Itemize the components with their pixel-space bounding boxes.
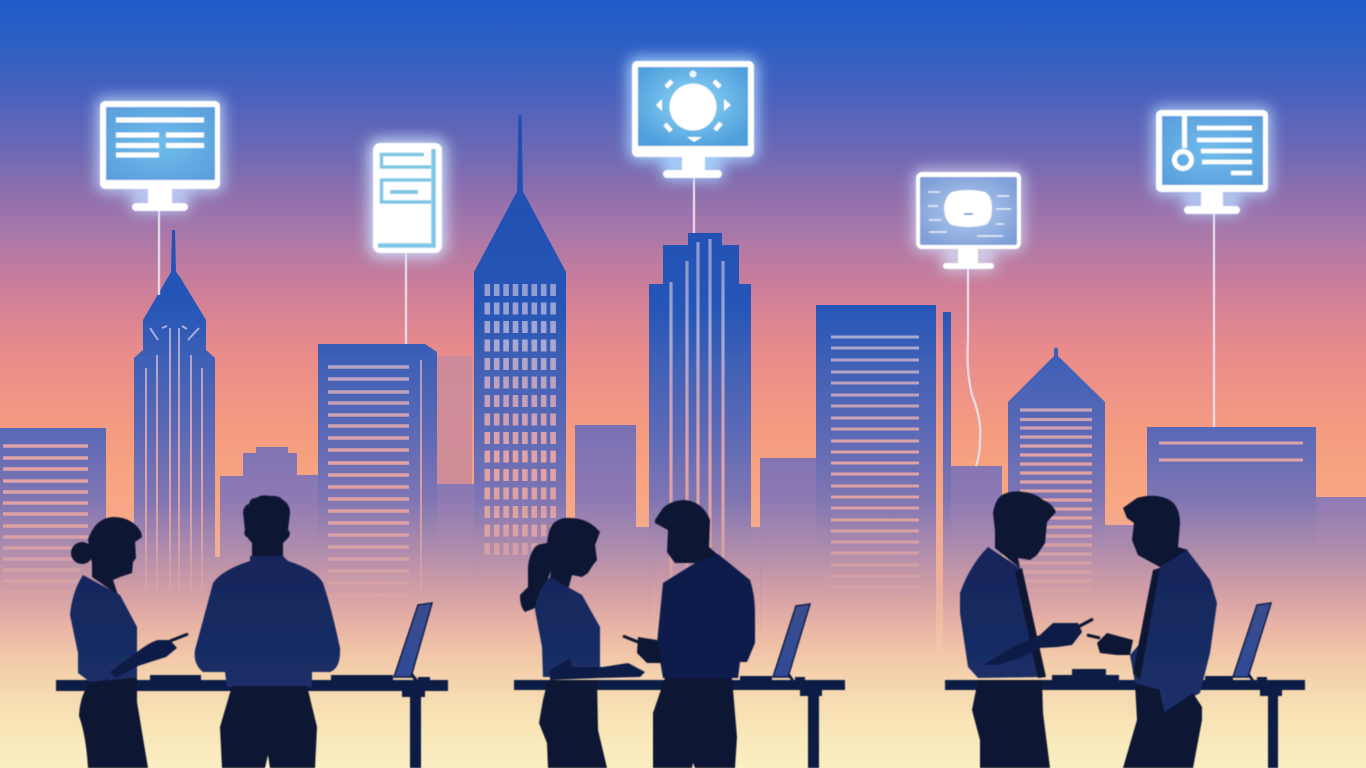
team one at left desk <box>56 495 448 768</box>
man on right with tie <box>1087 496 1217 768</box>
device: tablet document panel <box>368 138 447 258</box>
laptop two <box>773 604 810 677</box>
team three at right desk <box>945 491 1305 768</box>
back skyline layer <box>106 356 1366 672</box>
building: far left slatted block <box>0 428 106 672</box>
building: peaked roof tower <box>1008 348 1105 672</box>
connector lines from screens to the city <box>159 178 1214 466</box>
man seen from behind <box>195 495 340 768</box>
monitor: text panel <box>96 97 224 212</box>
monitor: hub diagram panel <box>913 169 1024 271</box>
woman with bun <box>70 517 188 768</box>
building: wide slatted tower <box>816 305 951 672</box>
desk three <box>945 669 1305 768</box>
team two at centre desk <box>514 500 845 768</box>
man looking at phone <box>623 500 755 768</box>
man on left with tie <box>960 491 1093 768</box>
building: tall spire tower with window grid <box>474 115 566 672</box>
desk two <box>514 671 845 768</box>
building: slatted office block <box>318 344 437 672</box>
building: art-deco tower with spire <box>134 230 215 672</box>
monitor: central gear panel <box>628 57 758 180</box>
building: low wide block <box>1147 427 1316 672</box>
laptop three <box>1233 603 1271 677</box>
desk one <box>56 671 448 768</box>
woman with ponytail <box>520 518 645 768</box>
laptop one <box>394 603 432 677</box>
monitor: node and text panel <box>1152 106 1272 215</box>
building: stepped tower <box>649 233 751 672</box>
